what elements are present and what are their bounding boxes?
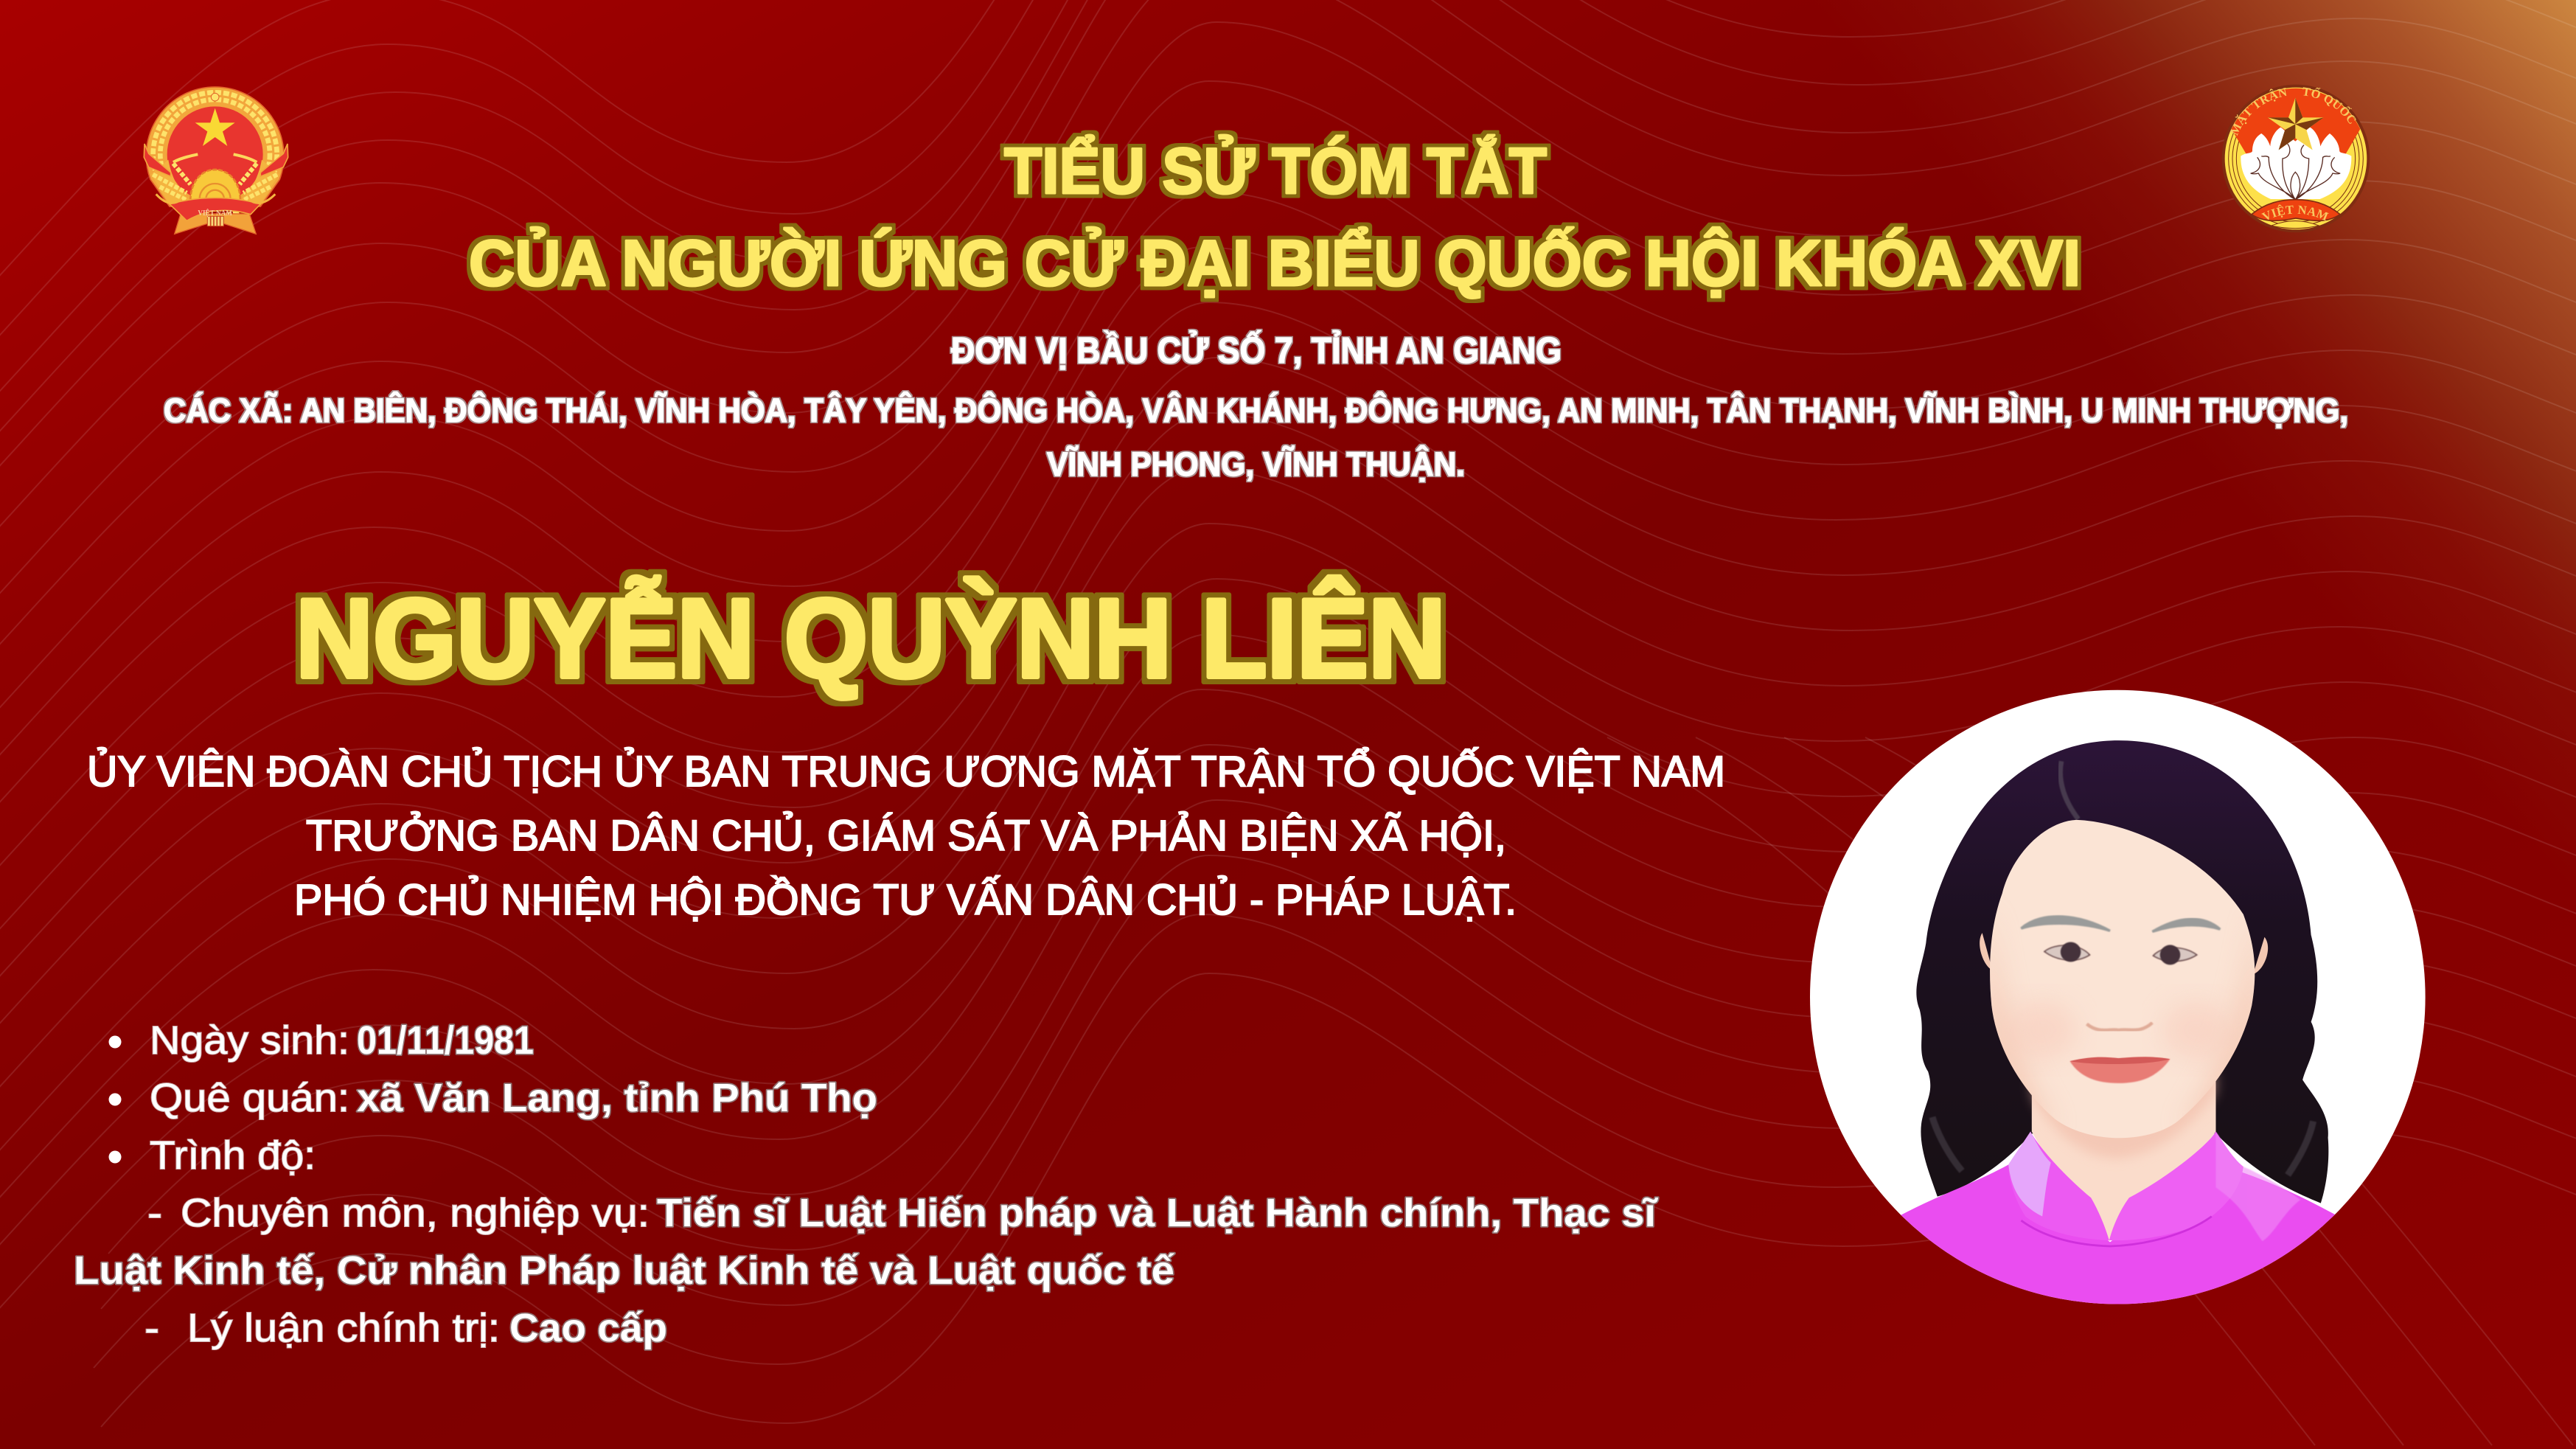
icon: Vietnam Fatherland Front emblem: TỔ QUỐC — [2303, 87, 2356, 124]
icon: Vietnam Fatherland Front emblem: VIỆT NAM — [2261, 204, 2329, 221]
professional qualification: Tiến sĩ Luật Hiến pháp và Luật Hành chính, Thạc sĩ — [657, 1191, 1658, 1235]
professional qualification: Luật Kinh tế, Cử nhân Pháp luật Kinh tế và Luật quốc tế — [74, 1248, 1175, 1293]
icon: Vietnam Fatherland Front emblem: MẶT TRẬN — [2229, 88, 2287, 136]
education heading: Trình độ: — [150, 1133, 316, 1178]
portrait photo — [1810, 690, 2426, 1341]
personal details list — [74, 1018, 1658, 1350]
hair — [1916, 740, 2328, 1203]
neck — [2032, 1071, 2215, 1241]
icon: Vietnam Fatherland Front emblem — [2222, 84, 2370, 232]
candidate positions — [87, 748, 1725, 924]
icon: national emblem of Vietnam — [144, 87, 288, 234]
list of communes: VĨNH PHONG, VĨNH THUẬN. — [1047, 445, 1465, 483]
candidate positions: PHÓ CHỦ NHIỆM HỘI ĐỒNG TƯ VẤN DÂN CHỦ - PHÁP LUẬT. — [294, 876, 1517, 924]
facial features — [2021, 917, 2220, 1083]
candidate positions: ỦY VIÊN ĐOÀN CHỦ TỊCH ỦY BAN TRUNG ƯƠNG MẶT TRẬN TỔ QUỐC VIỆT NAM — [87, 748, 1725, 796]
ears — [1980, 933, 2268, 974]
birth date: 01/11/1981 — [357, 1018, 534, 1063]
professional qualification: Chuyên môn, nghiệp vụ: — [181, 1191, 650, 1235]
icon: national emblem of Vietnam: VIỆT NAM — [198, 208, 233, 218]
candidate name: NGUYỄN QUỲNH LIÊN — [296, 576, 1446, 701]
professional qualification: - — [147, 1191, 162, 1235]
title — [469, 134, 2081, 299]
list of communes — [164, 392, 2348, 483]
birth date: Ngày sinh: — [150, 1018, 349, 1063]
political theory level: Lý luận chính trị: — [187, 1306, 500, 1350]
electoral unit heading: ĐƠN VỊ BẦU CỬ SỐ 7, TỈNH AN GIANG — [951, 330, 1562, 371]
political theory level — [145, 1306, 667, 1350]
hometown — [109, 1076, 877, 1120]
professional qualification — [74, 1191, 1658, 1293]
political theory level: - — [145, 1306, 159, 1350]
hometown: Quê quán: — [150, 1076, 349, 1120]
title: CỦA NGƯỜI ỨNG CỬ ĐẠI BIỂU QUỐC HỘI KHÓA XVI — [469, 226, 2081, 299]
hometown: xã Văn Lang, tỉnh Phú Thọ — [357, 1076, 877, 1120]
birth date — [109, 1018, 534, 1063]
dress — [1901, 1165, 2335, 1304]
political theory level: Cao cấp — [509, 1306, 667, 1350]
list of communes: CÁC XÃ: AN BIÊN, ĐÔNG THÁI, VĨNH HÒA, TÂY YÊN, ĐÔNG HÒA, VÂN KHÁNH, ĐÔNG HƯNG, AN MINH, TÂN THẠNH, VĨNH BÌNH, U MINH THƯỢNG, — [164, 392, 2348, 429]
candidate positions: TRƯỞNG BAN DÂN CHỦ, GIÁM SÁT VÀ PHẢN BIỆN XÃ HỘI, — [306, 812, 1506, 860]
title: TIỂU SỬ TÓM TẮT — [1004, 134, 1547, 207]
face — [1990, 820, 2255, 1138]
